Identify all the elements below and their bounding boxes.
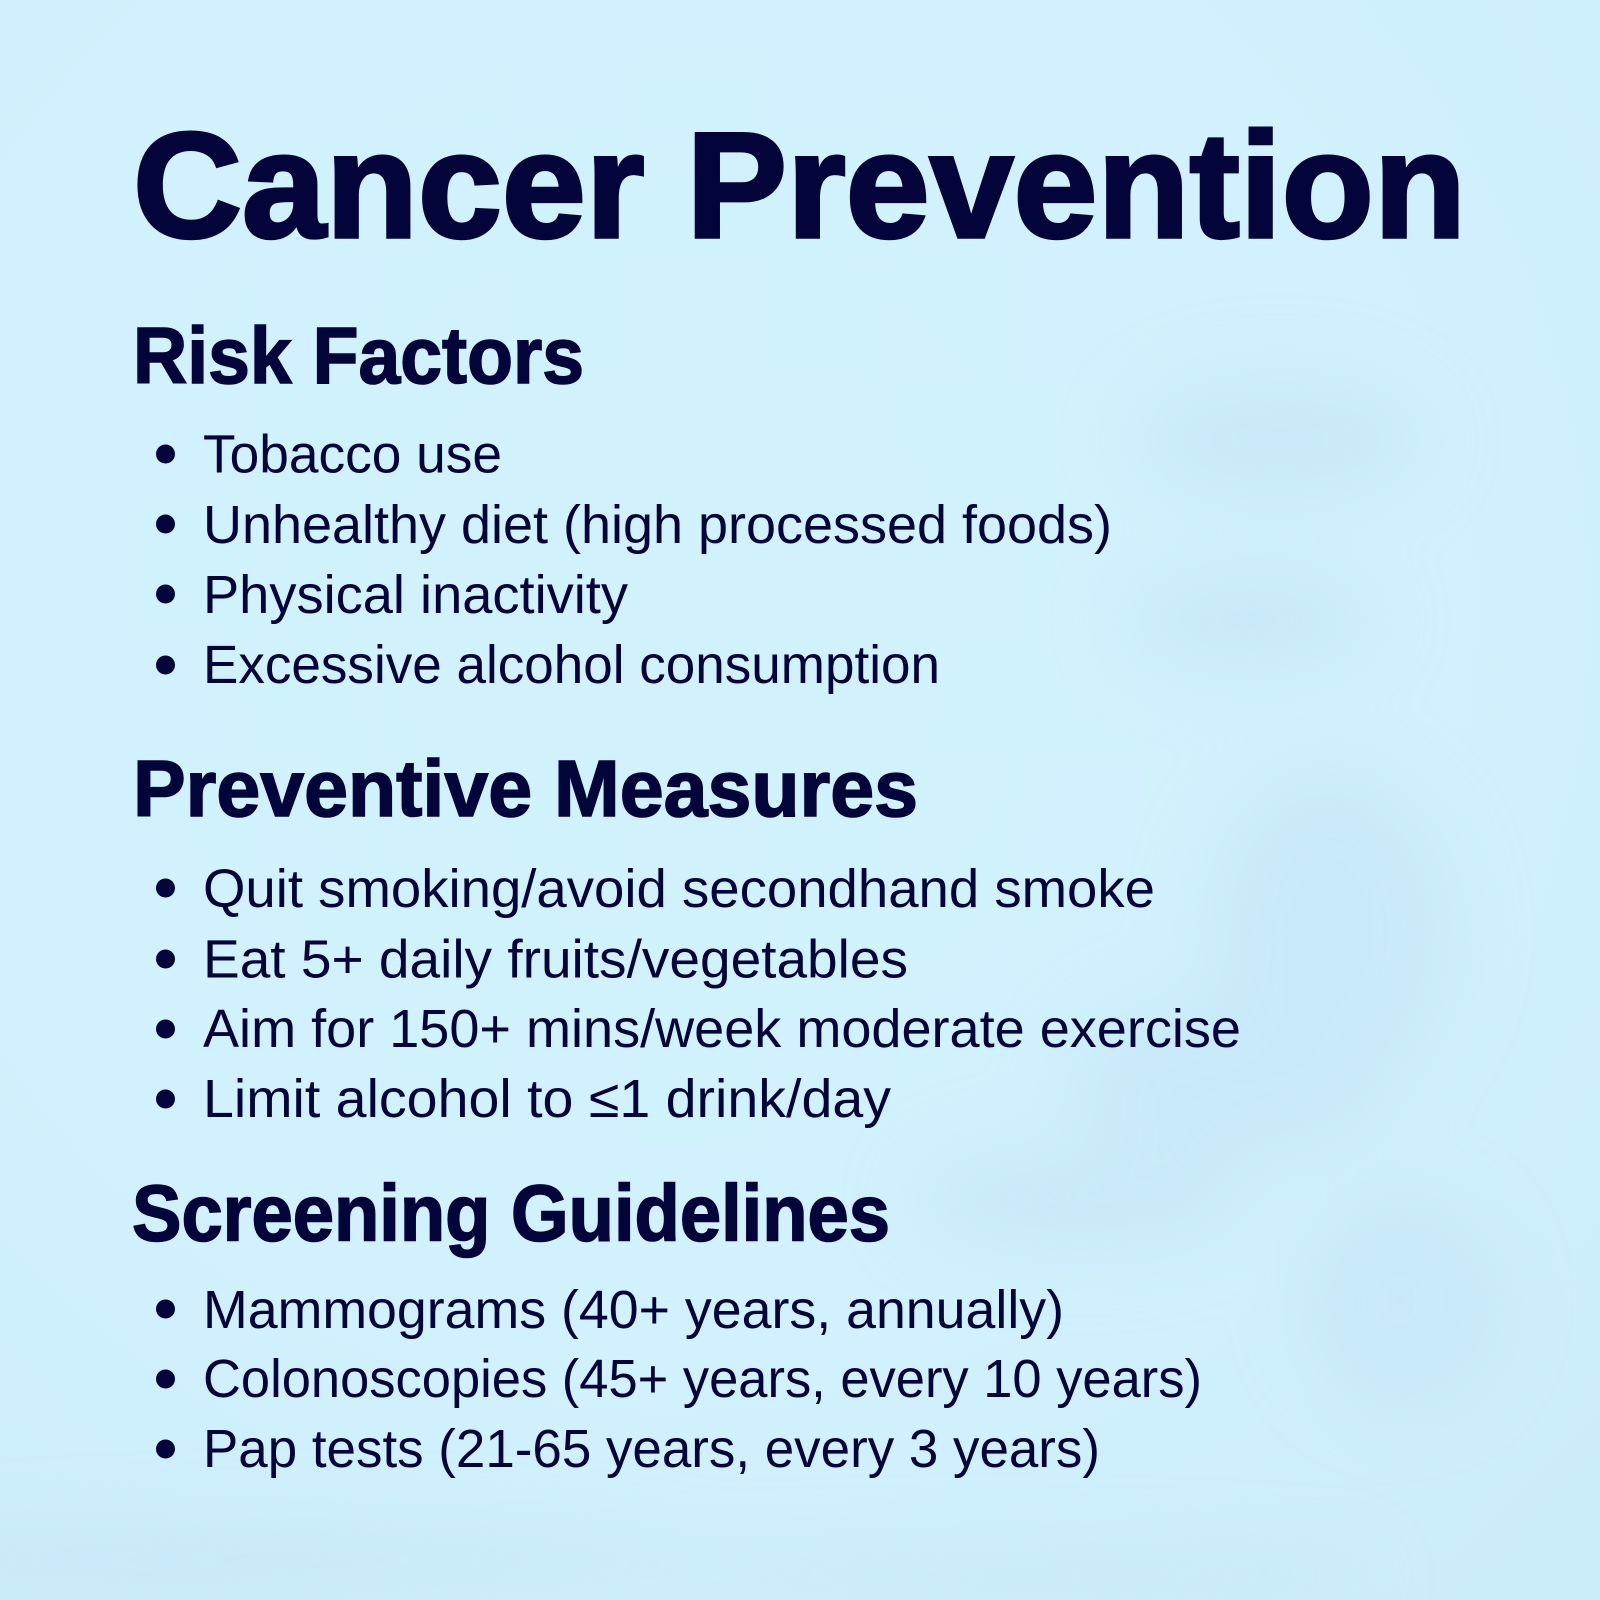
list: preventive measures: Limit alcohol to ≤1 drink/day [203, 1069, 891, 1129]
list: screening guidelines: Pap tests (21-65 years, every 3 years) [203, 1419, 1100, 1479]
section: screening guidelines [132, 1168, 1202, 1479]
section: risk factors [133, 311, 1112, 695]
list: risk factors: Excessive alcohol consumption [203, 635, 940, 695]
list: preventive measures [156, 859, 1241, 1129]
list: preventive measures: Eat 5+ daily fruits/vegetables [203, 930, 908, 990]
list: risk factors: Unhealthy diet (high processed foods) [203, 495, 1112, 555]
heading: screening guidelines: Screening Guidelines [132, 1168, 890, 1258]
list: risk factors [156, 424, 1112, 695]
heading: preventive measures: Preventive Measures [133, 744, 918, 833]
section: preventive measures [133, 744, 1241, 1129]
list: risk factors: Physical inactivity [203, 565, 628, 625]
title: Cancer Prevention [133, 101, 1466, 269]
list: screening guidelines: Colonoscopies (45+ years, every 10 years) [203, 1349, 1202, 1409]
list: screening guidelines [156, 1280, 1202, 1479]
list: screening guidelines: Mammograms (40+ years, annually) [203, 1280, 1064, 1340]
list: preventive measures: Aim for 150+ mins/week moderate exercise [203, 999, 1241, 1059]
list: risk factors: Tobacco use [203, 424, 502, 484]
heading: risk factors: Risk Factors [133, 311, 584, 400]
list: preventive measures: Quit smoking/avoid secondhand smoke [203, 859, 1155, 919]
